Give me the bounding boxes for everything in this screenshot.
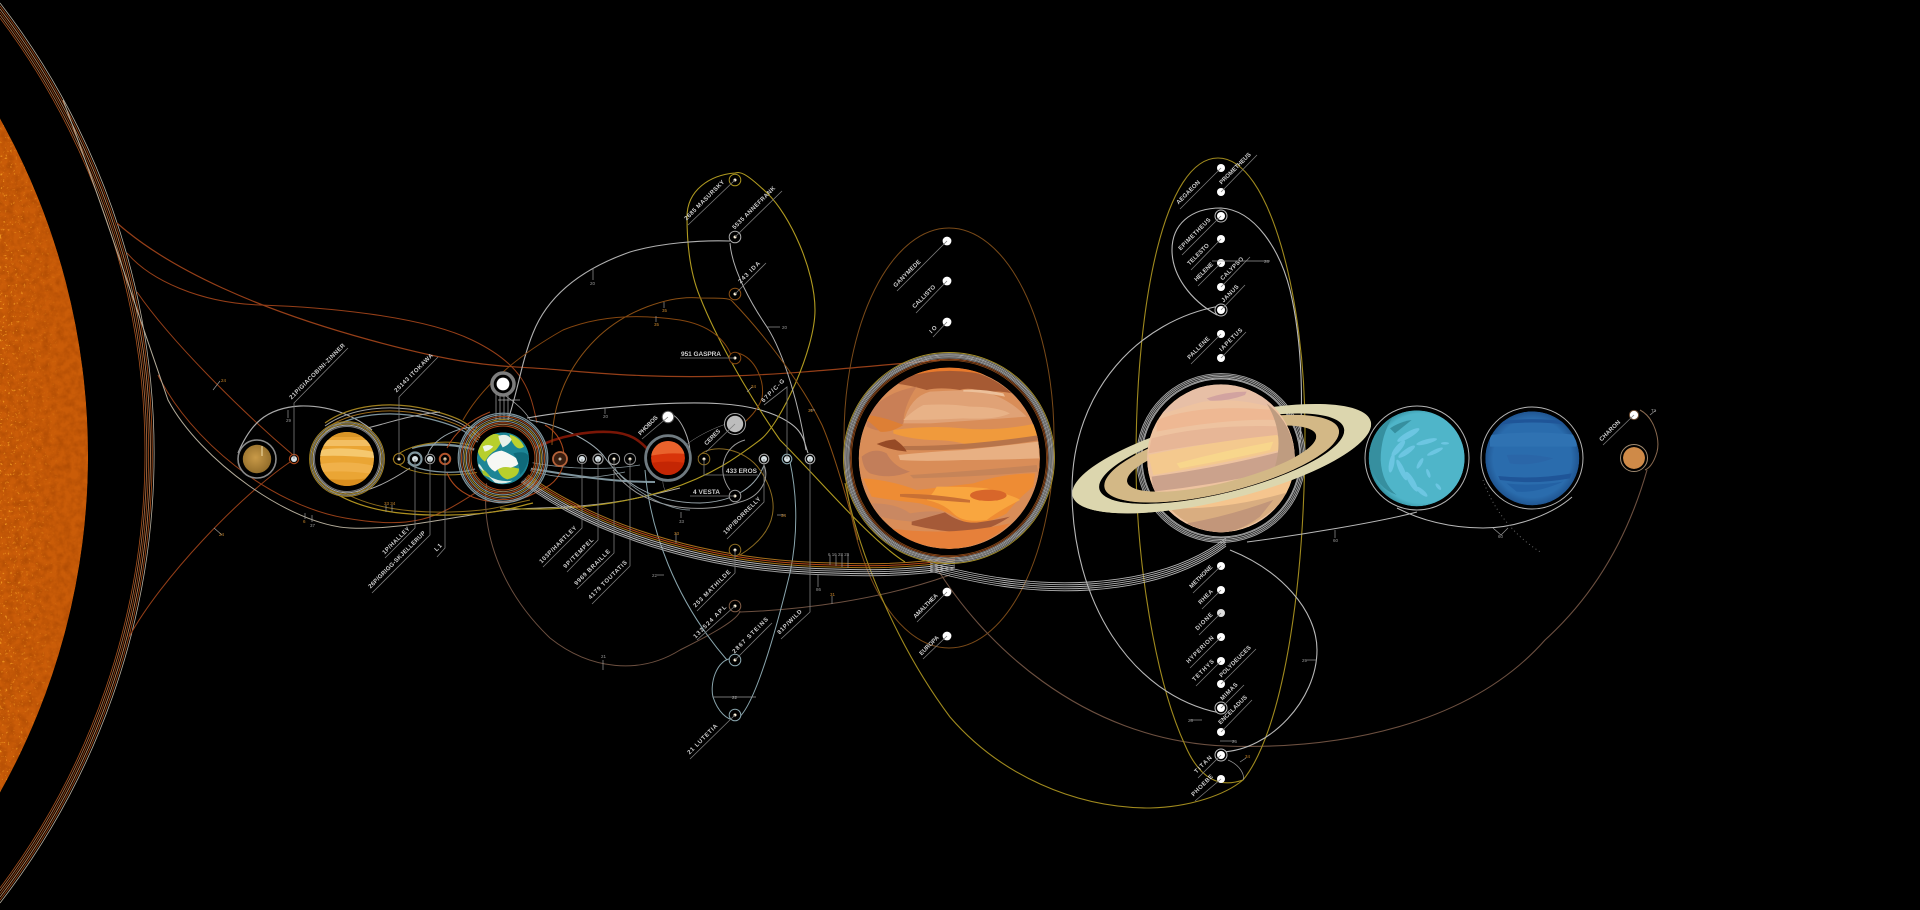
label: 25143 Itokawa xyxy=(394,353,438,459)
moon: ganymede xyxy=(943,237,951,245)
label: 25143 Itokawa: 25143 ITOKAWA xyxy=(394,353,435,394)
label: 2867 Steins: 2867 STEINS xyxy=(732,617,770,655)
node: 25143 Itokawa xyxy=(394,454,404,464)
moon: helene xyxy=(1217,259,1225,267)
moon: tethys xyxy=(1217,657,1225,665)
node: 433 Eros xyxy=(698,453,710,465)
trajectory: grey oval over earth xyxy=(427,420,764,503)
label: 132524 APL: 132524 APL xyxy=(693,604,728,640)
node: 103P xyxy=(577,454,587,464)
trajectory: sun to comet node xyxy=(137,292,293,455)
label: Callisto: CALLISTO xyxy=(912,284,937,310)
node: 1P/Halley xyxy=(408,452,422,466)
tick 26 xyxy=(1220,739,1238,744)
label: 253 Mathilde: 253 MATHILDE xyxy=(693,569,732,609)
tick 60 neptune xyxy=(1493,528,1508,539)
label: 4179 Toutatis xyxy=(588,459,630,604)
tick 34: 34 xyxy=(751,384,757,389)
label: Calypso xyxy=(1220,256,1250,287)
node: 19P/Borrelly xyxy=(759,454,769,464)
label: 9P/Tempel xyxy=(563,459,598,572)
node: 5535 Annefrank xyxy=(729,231,741,243)
label: Enceladus: ENCELADUS xyxy=(1218,695,1249,726)
node: 4 Vesta xyxy=(729,490,741,502)
node: L1 xyxy=(440,454,450,464)
planet: earth xyxy=(458,413,548,503)
label: Janus xyxy=(1221,284,1245,310)
trajectory: gaspra arc xyxy=(463,317,763,428)
label: 9969 Braille xyxy=(574,459,614,589)
tick 34 eros: 34 xyxy=(781,513,787,518)
label: 21P/Giacobini-Zinner: 21P/GIACOBINI-ZINNER xyxy=(289,343,347,401)
tick 28 xyxy=(1188,718,1202,723)
phobos xyxy=(662,411,674,423)
tick 28 xyxy=(1212,259,1270,264)
trajectory: moon leader lines xyxy=(496,392,530,420)
node: 132524 APL xyxy=(729,600,741,612)
tick 28: 28 xyxy=(1264,259,1270,264)
label: 1P/Halley xyxy=(382,459,415,558)
tick 20: 20 xyxy=(603,414,609,419)
label: Europa xyxy=(919,635,947,659)
label: Rhea xyxy=(1198,589,1221,609)
label: 81P/Wild: 81P/WILD xyxy=(777,609,804,636)
node: 21 Lutetia xyxy=(729,709,741,721)
label: Calypso: CALYPSO xyxy=(1220,256,1245,282)
label: Methone: METHONE xyxy=(1189,565,1214,590)
moon: phoebe xyxy=(1217,775,1225,783)
trajectory: yellow Masursky loop xyxy=(500,173,905,562)
label: 21 Lutetia: 21 LUTETIA xyxy=(687,723,720,756)
moon: charon xyxy=(1629,410,1639,420)
planet: jupiter xyxy=(844,352,1054,564)
label: 9P/Tempel: 9P/TEMPEL xyxy=(563,537,596,570)
tick 34 titan xyxy=(1228,754,1251,780)
label: L1: L1 xyxy=(434,543,444,553)
label: Mimas: MIMAS xyxy=(1220,682,1240,702)
tick group jupiter xyxy=(828,552,850,568)
jupiter to saturn bundle xyxy=(930,538,1226,591)
label: 21P/Giacobini-Zinner xyxy=(289,343,348,459)
trajectory: annefrank arc xyxy=(508,241,730,420)
node: 4179 Toutatis xyxy=(624,453,636,465)
label: 4 Vesta: 4 VESTA xyxy=(693,489,720,496)
label: Hyperion: HYPERION xyxy=(1186,635,1215,665)
node: 253 Mathilde xyxy=(729,544,741,556)
label: Dione xyxy=(1195,612,1221,635)
tick 35 xyxy=(662,302,668,313)
planet: pluto xyxy=(1620,444,1648,472)
tick 22: 22 xyxy=(652,573,658,578)
tick 29 xyxy=(286,410,292,423)
tick 21: 21 xyxy=(601,654,607,659)
node: 26P xyxy=(425,454,435,464)
tick 6 xyxy=(303,513,306,524)
tick 28: 28 xyxy=(1188,718,1194,723)
comet node 21P xyxy=(289,454,299,464)
moon: rhea xyxy=(1217,586,1225,594)
saturn globe xyxy=(1147,383,1295,533)
label: 4 Vesta xyxy=(690,489,735,496)
moon: io xyxy=(943,318,951,326)
tick 31: 31 xyxy=(808,408,814,413)
planet: mercury xyxy=(238,440,276,478)
node: 9P xyxy=(593,454,603,464)
moon: amalthea xyxy=(943,588,951,596)
tick charon xyxy=(1650,408,1657,415)
planet: venus xyxy=(310,422,384,496)
trajectory: earth to 81P grey xyxy=(527,403,808,453)
label: Telesto: TELESTO xyxy=(1187,243,1211,267)
tick 6: 6 xyxy=(303,519,306,524)
moon: pallene xyxy=(1217,330,1225,338)
label: Mimas xyxy=(1220,682,1244,708)
trajectory: ida arc xyxy=(552,298,858,540)
tick 20 right: 20 xyxy=(782,325,788,330)
label: 103P/Hartley xyxy=(539,459,582,567)
label: Europa: EUROPA xyxy=(919,635,941,657)
asteroid nodes xyxy=(698,174,815,721)
label: Helene xyxy=(1194,262,1221,286)
tick 37: 37 xyxy=(310,523,316,528)
trajectory: grey swirl near ceres xyxy=(663,424,726,490)
moon: telesto xyxy=(1217,235,1225,243)
tick 33 34 xyxy=(384,501,396,512)
moon: janus xyxy=(1215,304,1227,316)
tick 34 eros xyxy=(777,513,787,518)
tick 60 saturn xyxy=(1333,530,1339,543)
label: 4179 Toutatis: 4179 TOUTATIS xyxy=(588,560,629,601)
label: 19P/Borrelly xyxy=(723,459,764,539)
label: Charon: CHARON xyxy=(1599,420,1622,443)
trajectory: sun to jupiter via earth xyxy=(117,223,940,377)
trajectory: venus-to-earth grey bundle xyxy=(325,405,480,444)
sun orbit ring bundle xyxy=(0,3,154,903)
label: Phobos: PHOBOS xyxy=(638,415,660,437)
planet: uranus xyxy=(1365,406,1469,510)
label: Aegaeon xyxy=(1176,168,1221,209)
tick 29: 29 xyxy=(1302,658,1308,663)
tick charon: T1 xyxy=(1651,408,1657,413)
label: 243 Ida xyxy=(735,260,766,294)
label: 103P/Hartley: 103P/HARTLEY xyxy=(539,525,578,565)
tick 35 lower xyxy=(654,316,660,327)
label: Ceres: CERES xyxy=(704,429,722,447)
label: L1 xyxy=(434,459,445,557)
label: Iapetus: IAPETUS xyxy=(1219,328,1244,353)
label: 433 Eros: 433 EROS xyxy=(726,468,758,475)
moon: calypso xyxy=(1217,283,1225,291)
trajectory: yellow saturn cassini xyxy=(845,158,1305,808)
saturn rings front xyxy=(1072,422,1372,514)
trajectory: uranus to neptune xyxy=(1397,497,1572,528)
tick 33 grey xyxy=(679,512,685,524)
tick 86: 86 xyxy=(816,587,822,592)
label: 26P/Grigg-Skjellerup: 26P/GRIGG-SKJELLERUP xyxy=(368,531,427,590)
tick 33 34: 33 34 xyxy=(384,501,396,506)
tick 21 xyxy=(601,654,607,670)
jupiter moons xyxy=(943,237,951,640)
label: 67P/C-G: 67P/C-G xyxy=(761,378,786,404)
trajectory: dotted extension xyxy=(1483,480,1542,553)
trajectory: phobos loop xyxy=(673,415,690,453)
label: Rhea: RHEA xyxy=(1198,589,1215,606)
mission trajectories xyxy=(63,100,1658,808)
trajectory: steins lutetia blue grey xyxy=(645,462,796,720)
tick 29 xyxy=(1302,658,1317,663)
object labels xyxy=(289,152,1634,801)
trajectory: epimetheus loop xyxy=(1172,208,1301,470)
trajectory: earth to mars dark red xyxy=(535,432,650,452)
trajectory: comet node back to sun ring xyxy=(129,460,293,637)
planet: saturn xyxy=(1063,374,1381,542)
tick 20 upper xyxy=(590,268,596,286)
label: 243 Ida: 243 IDA xyxy=(738,260,762,285)
label: Polydeuces: POLYDEUCES xyxy=(1219,645,1253,679)
tick 60 neptune: 60 xyxy=(1498,534,1504,539)
moon: dione xyxy=(1217,609,1225,617)
label: 253 Mathilde xyxy=(693,550,735,611)
label: Epimetheus: EPIMETHEUS xyxy=(1178,217,1212,252)
label: 5535 Annefrank: 5535 ANNEFRANK xyxy=(732,185,777,231)
moon: enceladus xyxy=(1217,728,1225,736)
moon: methone xyxy=(1217,562,1225,570)
label: Ganymede xyxy=(893,241,947,291)
tick 35 lower: 35 xyxy=(654,322,660,327)
tick 24 lower: 24 xyxy=(219,532,225,537)
trajectory: earth orange loops xyxy=(447,425,564,502)
trajectory: sun to earth second arc xyxy=(127,253,537,423)
label: Aegaeon: AEGAEON xyxy=(1176,180,1202,206)
label: 1P/Halley: 1P/HALLEY xyxy=(382,526,411,556)
label: 433 Eros xyxy=(704,459,758,475)
planet: neptune xyxy=(1481,407,1583,509)
moon: titan xyxy=(1215,749,1227,761)
tick 20 upper: 20 xyxy=(590,281,596,286)
moon: polydeuces xyxy=(1217,680,1225,688)
tick 86 xyxy=(816,575,822,592)
tick 60 saturn: 60 xyxy=(1333,538,1339,543)
trajectory: jupiter orange oval xyxy=(844,228,1054,648)
node: 951 Gaspra xyxy=(729,352,741,364)
tick 29: 29 xyxy=(286,418,292,423)
tick 33 grey: 33 xyxy=(679,519,685,524)
label: Prometheus: PROMETHEUS xyxy=(1219,152,1253,186)
tick 31 mid: 31 xyxy=(830,592,836,597)
saturn moons xyxy=(1215,164,1227,783)
moon: epimetheus xyxy=(1215,210,1227,222)
label: Pallene xyxy=(1187,334,1221,364)
label: 26P/Grigg-Skjellerup xyxy=(368,459,430,593)
node: orange star xyxy=(553,452,567,466)
moon: hyperion xyxy=(1217,633,1225,641)
tick 22 lutetia xyxy=(713,695,756,700)
label: 67P/C-G xyxy=(761,378,787,459)
tick 35: 35 xyxy=(662,308,668,313)
label: Charon xyxy=(1599,415,1634,445)
node: 2685 Masursky xyxy=(729,174,741,186)
trajectory: venus to halley xyxy=(357,468,410,492)
moon xyxy=(492,373,514,395)
trajectory: pluto brown arc xyxy=(935,470,1647,746)
label: Amalthea: AMALTHEA xyxy=(913,593,940,620)
tick 33: 33 xyxy=(674,531,680,536)
label: Titan xyxy=(1194,755,1221,778)
node: 67P xyxy=(782,454,792,464)
label: 2685 Masursky: 2685 MASURSKY xyxy=(684,180,726,222)
label: Janus: JANUS xyxy=(1221,284,1241,304)
trajectory: vesta grey xyxy=(613,440,766,508)
label: Tethys: TETHYS xyxy=(1192,659,1216,683)
moon: callisto xyxy=(943,277,951,285)
trajectory: eros brown yellow xyxy=(698,449,773,555)
tick 37 xyxy=(310,515,316,528)
earth to jupiter bundle xyxy=(515,465,955,576)
label: 9969 Braille: 9969 BRAILLE xyxy=(574,549,612,587)
label: Io: IO xyxy=(929,325,939,335)
label: Ganymede: GANYMEDE xyxy=(893,259,922,289)
trajectory: venus lower yellow bundle xyxy=(330,490,533,515)
moon: europa xyxy=(943,632,951,640)
tick 20 xyxy=(603,408,609,419)
node: 2867 Steins xyxy=(729,654,741,666)
trajectory: halley steel band xyxy=(412,445,482,452)
trajectory: saturn to titan xyxy=(1222,550,1317,752)
node: 81P/Wild xyxy=(805,454,815,464)
label: Pallene: PALLENE xyxy=(1187,336,1212,361)
label: 21 Lutetia xyxy=(687,715,735,759)
tick 22 xyxy=(652,573,664,578)
label: Io xyxy=(929,322,947,337)
label: 19P/Borrelly: 19P/BORRELLY xyxy=(723,496,762,536)
moon: aegaeon xyxy=(1217,164,1225,172)
mission number ticks xyxy=(213,259,1657,780)
label: Titan: TITAN xyxy=(1194,755,1214,775)
trajectory: charon loop xyxy=(1640,410,1658,470)
trajectory: inner comet lines xyxy=(528,462,690,510)
trajectory: mercury loop xyxy=(238,406,372,453)
tick 20 right xyxy=(767,325,788,330)
trajectory: grey return from sun xyxy=(63,100,680,528)
trajectory: janus to mimas xyxy=(1072,306,1220,713)
tick 22 lutetia: 22 xyxy=(732,695,738,700)
trajectory: APL brown arc xyxy=(486,480,950,666)
tick 34 titan: 34 xyxy=(1245,754,1251,759)
trajectory: saturn to uranus xyxy=(1247,512,1417,542)
label: 951 Gaspra: 951 GASPRA xyxy=(681,351,721,358)
label: Dione: DIONE xyxy=(1195,612,1215,632)
label: Callisto xyxy=(912,281,947,313)
sun xyxy=(0,118,88,792)
tick 34 xyxy=(747,384,757,392)
label: 81P/Wild xyxy=(777,459,810,639)
ceres xyxy=(724,414,746,434)
planet: mars xyxy=(646,436,690,480)
moon: prometheus xyxy=(1217,188,1225,196)
tick 31 mid xyxy=(830,592,836,604)
label: Telesto xyxy=(1187,239,1221,270)
label: Phobos xyxy=(638,415,668,439)
label: Ceres xyxy=(704,424,735,452)
tick 33 xyxy=(674,531,680,543)
tick 24 lower xyxy=(214,528,225,537)
saturn rings back xyxy=(1063,381,1381,536)
moon: mimas xyxy=(1215,702,1227,714)
trajectory: yellow oval xyxy=(393,442,480,475)
node: 9969 Braille xyxy=(608,453,620,465)
tick group jupiter: 6 16 28 29 xyxy=(828,552,850,557)
trajectory: orange return to earth xyxy=(158,375,480,523)
tick 26: 26 xyxy=(1232,739,1238,744)
comet nodes right of earth xyxy=(553,452,636,466)
moon: iapetus xyxy=(1217,354,1225,362)
tick 24: 24 xyxy=(221,378,227,383)
label: Phoebe: PHOEBE xyxy=(1191,774,1215,798)
comet nodes left of earth xyxy=(394,452,450,466)
tick 24 xyxy=(213,378,227,390)
node: 243 Ida xyxy=(729,288,741,300)
label: Helene: HELENE xyxy=(1194,262,1215,283)
